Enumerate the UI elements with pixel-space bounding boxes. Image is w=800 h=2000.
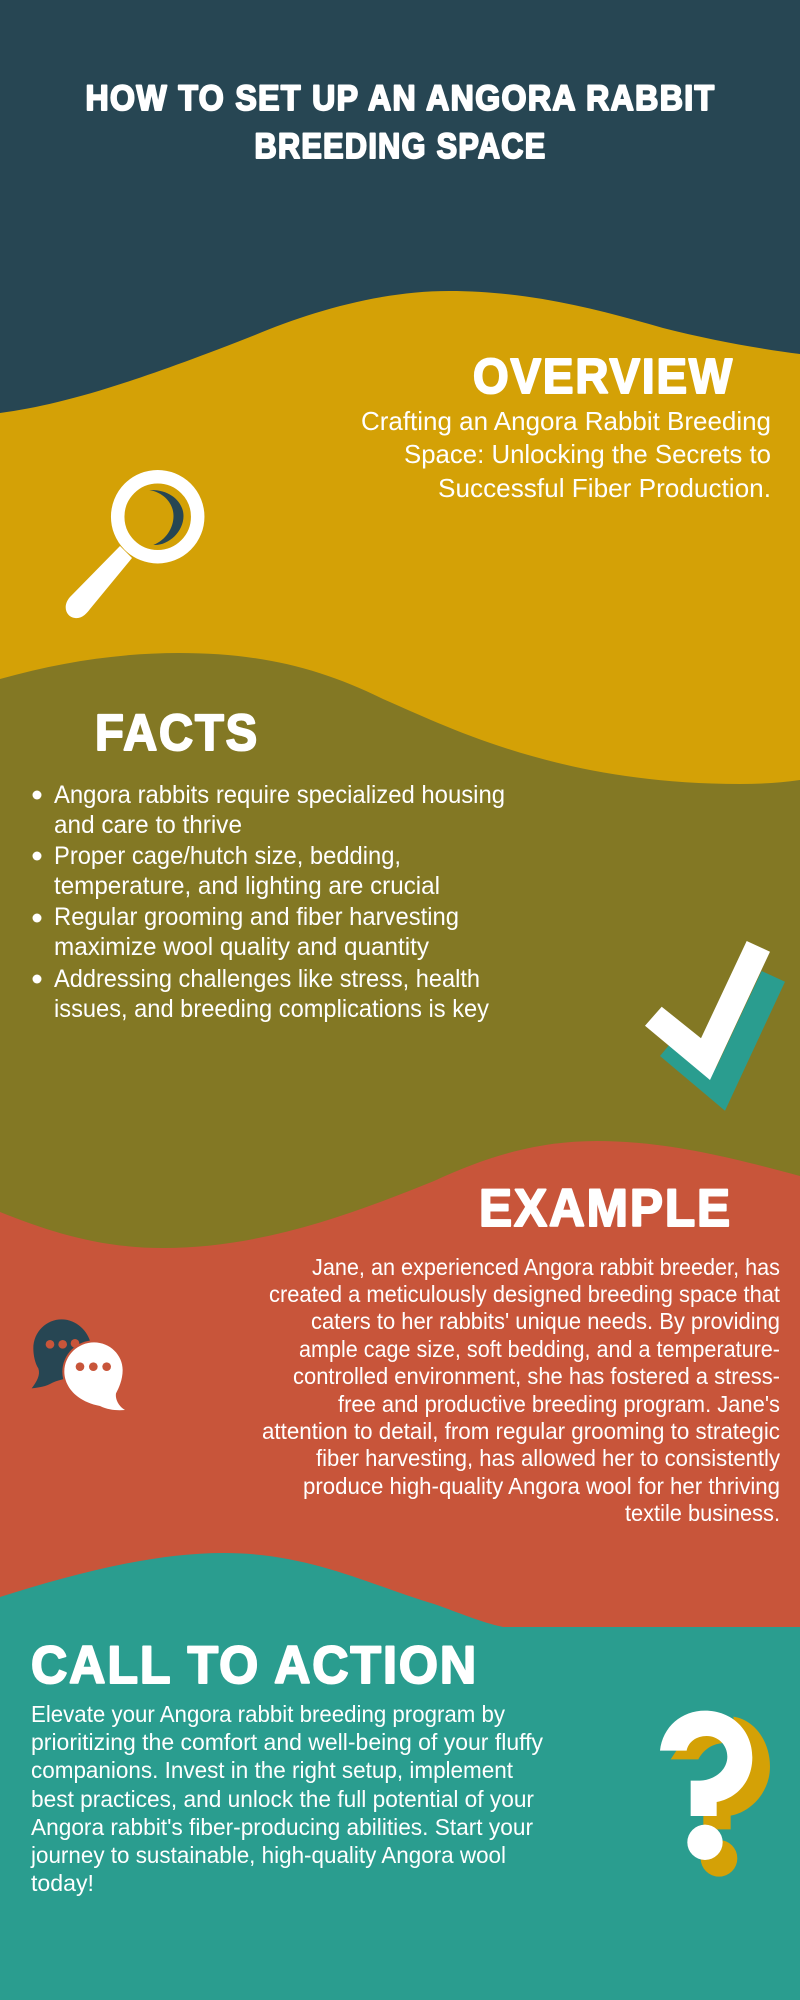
heading: overview: OVERVIEW xyxy=(473,350,734,404)
list: facts: temperature, and lighting are crucial xyxy=(54,872,440,900)
list: facts: Proper cage/hutch size, bedding, xyxy=(54,842,401,870)
icon: speech bubbles xyxy=(32,1319,125,1410)
list: facts: Addressing challenges like stress, health xyxy=(54,965,480,993)
text block: call to action xyxy=(30,1701,543,1896)
text block: overview: Successful Fiber Production. xyxy=(438,473,771,503)
text block: example: fiber harvesting, has allowed her to consistently xyxy=(316,1445,780,1471)
icon: question mark xyxy=(660,1711,770,1877)
heading: call to action: CALL TO ACTION xyxy=(31,1636,478,1695)
heading: example: EXAMPLE xyxy=(479,1179,732,1238)
text block: example: produce high-quality Angora wool for her thriving xyxy=(303,1473,780,1499)
title: BREEDING SPACE xyxy=(254,127,546,166)
text block: example: caters to her rabbits' unique needs. By providing xyxy=(311,1308,780,1334)
text block: example xyxy=(262,1254,781,1526)
list: facts xyxy=(32,781,505,1023)
text block: example: attention to detail, from regular grooming to strategic xyxy=(262,1418,780,1444)
list: facts: issues, and breeding complications is key xyxy=(54,995,489,1023)
list: facts: and care to thrive xyxy=(54,811,242,839)
text block: call to action: Elevate your Angora rabbit breeding program by xyxy=(31,1701,505,1727)
title: HOW TO SET UP AN ANGORA RABBIT xyxy=(86,79,716,118)
text block: call to action: journey to sustainable, high-quality Angora wool xyxy=(30,1842,506,1868)
panel: facts xyxy=(0,653,800,2000)
text block: example: controlled environment, she has fostered a stress- xyxy=(293,1363,780,1389)
text block: overview: Space: Unlocking the Secrets to xyxy=(404,439,771,469)
text block: example: free and productive breeding program. Jane's xyxy=(338,1391,780,1417)
list: facts: Regular grooming and fiber harvesting xyxy=(54,903,459,931)
icon: check mark xyxy=(645,941,785,1111)
text block: example: Jane, an experienced Angora rabbit breeder, has xyxy=(312,1254,780,1280)
icon: magnifying glass xyxy=(66,477,198,618)
text block: example: created a meticulously designed breeding space that xyxy=(269,1281,781,1307)
text block: overview xyxy=(361,406,771,503)
text block: call to action: prioritizing the comfort and well-being of your fluffy xyxy=(31,1729,543,1755)
text block: call to action: companions. Invest in the right setup, implement xyxy=(31,1757,513,1783)
text block: overview: Crafting an Angora Rabbit Breeding xyxy=(361,406,771,436)
text block: example: ample cage size, soft bedding, and a temperature- xyxy=(299,1336,780,1362)
list: facts: maximize wool quality and quantity xyxy=(54,933,429,961)
title xyxy=(86,79,716,166)
panel: example xyxy=(0,1141,800,2000)
heading: facts: FACTS xyxy=(95,704,259,761)
panel: call to action xyxy=(0,1553,800,2000)
list: facts: Angora rabbits require specialized housing xyxy=(54,781,505,809)
text block: example: textile business. xyxy=(625,1500,780,1526)
text block: call to action: best practices, and unlock the full potential of your xyxy=(31,1786,534,1812)
text block: call to action: Angora rabbit's fiber-producing abilities. Start your xyxy=(31,1814,533,1840)
text block: call to action: today! xyxy=(31,1870,94,1896)
